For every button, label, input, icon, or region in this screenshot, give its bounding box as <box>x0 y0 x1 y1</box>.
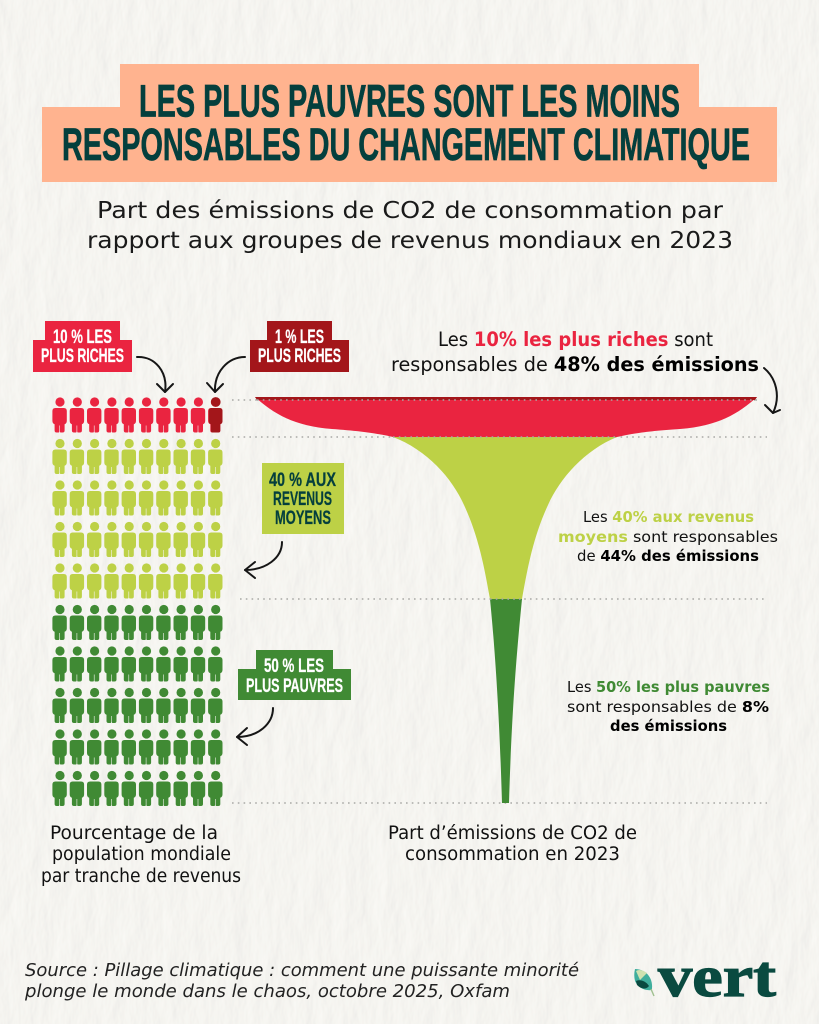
rows: middle 40 percent <box>52 439 223 598</box>
arrow: 40 percent label to pictogram <box>245 542 282 578</box>
subtitle <box>87 198 733 254</box>
rows: poorest 50 percent <box>52 605 223 806</box>
caption: population: par tranche de revenus <box>41 866 241 887</box>
callout: poorest 50 percent: Les 50% les plus pauvres <box>567 678 770 696</box>
label: 1 percent richest: 1 % LES <box>275 326 324 348</box>
callout: middle 40 percent <box>558 508 778 565</box>
label: 50 percent poorest: PLUS PAUVRES <box>246 675 343 697</box>
arrow: 1 percent label to pictogram <box>207 357 245 392</box>
source note: plonge le monde dans le chaos, octobre 2025, Oxfam <box>24 981 510 1002</box>
subtitle: rapport aux groupes de revenus mondiaux en 2023 <box>87 228 733 254</box>
callout: poorest 50 percent: des émissions <box>610 717 727 735</box>
subtitle: Part des émissions de CO2 de consommation par <box>97 198 724 224</box>
label: 40 percent middle income <box>262 463 344 534</box>
label: 1 percent richest: PLUS RICHES <box>258 345 341 367</box>
callout: middle 40 percent: de 44% des émissions <box>577 547 759 565</box>
caption: population: population mondiale <box>52 844 231 865</box>
funnel chart: emissions share <box>255 397 757 803</box>
label: 50 percent poorest <box>238 650 351 700</box>
callout: poorest 50 percent <box>567 678 770 735</box>
caption: emissions: Part d’émissions de CO2 de <box>388 823 637 844</box>
funnel: poorest 50 percent <box>490 599 522 803</box>
caption: population: Pourcentage de la <box>50 823 218 844</box>
label: 50 percent poorest: 50 % LES <box>264 655 324 677</box>
row: richest 10 percent including top 1 percent <box>52 397 223 432</box>
icon: leaf <box>634 969 654 996</box>
source note <box>24 960 579 1002</box>
callout: middle 40 percent: moyens sont responsables <box>558 528 778 546</box>
label: 1 percent richest <box>250 321 349 372</box>
label: 40 percent middle income: REVENUS <box>273 488 332 510</box>
callout: richest 10 percent <box>391 328 759 376</box>
pictogram: population by income group <box>52 397 223 806</box>
caption: population <box>41 823 241 887</box>
arrow: callout to funnel <box>764 368 780 413</box>
funnel: top dark band <box>255 397 757 400</box>
caption: emissions <box>388 823 637 865</box>
funnel: richest 10 percent <box>255 397 757 437</box>
callout: richest 10 percent: responsables de 48% des émissions <box>391 353 759 376</box>
redraw dotted guides over funnel <box>257 400 757 599</box>
dotted guide lines <box>232 400 767 803</box>
callout: middle 40 percent: Les 40% aux revenus <box>583 508 754 526</box>
logo: vert <box>634 944 777 1009</box>
arrow: 10 percent label to pictogram <box>137 357 173 392</box>
title banner <box>42 64 777 182</box>
caption: emissions: consommation en 2023 <box>405 844 620 865</box>
callout: poorest 50 percent: sont responsables de 8% <box>567 698 769 716</box>
source note: Source : Pillage climatique : comment une puissante minorité <box>25 960 579 981</box>
label: 10 percent richest: 10 % LES <box>53 326 112 348</box>
label: 10 percent richest: PLUS RICHES <box>41 345 124 367</box>
label: 10 percent richest <box>33 321 132 372</box>
wordmark: vert <box>658 944 777 1009</box>
callout: richest 10 percent: Les 10% les plus riches sont <box>438 328 713 351</box>
label: 40 percent middle income: 40 % AUX <box>269 469 336 491</box>
funnel: middle 40 percent <box>393 437 617 599</box>
label: 40 percent middle income: MOYENS <box>275 507 331 529</box>
arrow: 50 percent label to pictogram <box>237 708 273 745</box>
